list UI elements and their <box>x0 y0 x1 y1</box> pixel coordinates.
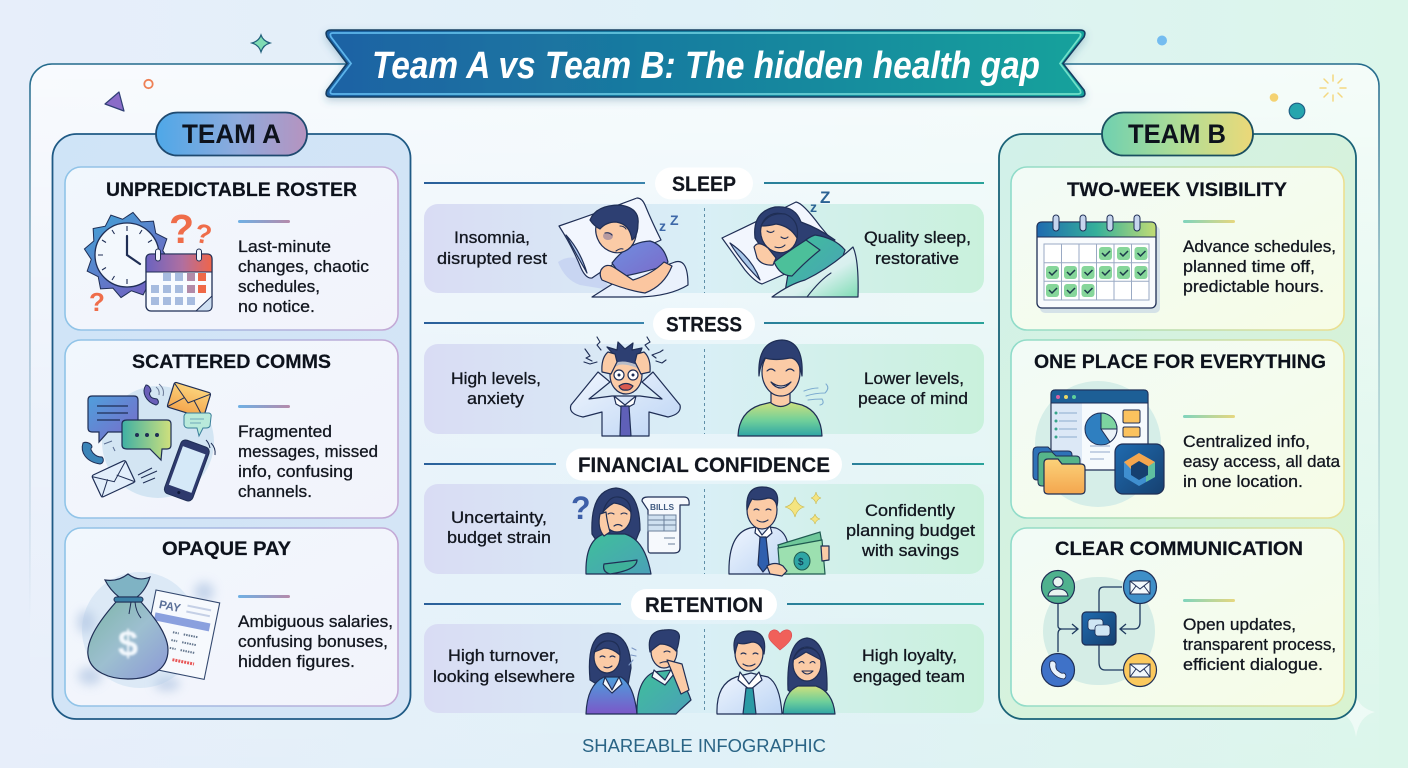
team B text <box>864 228 971 268</box>
description: changes, chaotic <box>238 257 370 276</box>
icon: disengaged coworkers <box>586 630 691 714</box>
team A pill: TEAM A <box>182 119 281 149</box>
description: messages, missed <box>238 442 378 461</box>
section: financial confidence <box>424 448 984 576</box>
panel: team B <box>999 112 1356 719</box>
team A pill <box>156 112 307 156</box>
comparison band <box>424 204 984 293</box>
team B text: Lower levels, <box>864 369 964 388</box>
description: transparent process, <box>1183 635 1336 654</box>
card: two-week visibility <box>1011 167 1344 330</box>
description: confusing bonuses, <box>238 632 388 651</box>
section: stress <box>424 308 984 436</box>
accent line <box>238 405 290 408</box>
accent line <box>1183 599 1235 602</box>
card: one place for everything <box>1011 340 1344 518</box>
icon: restful sleeper: Z <box>820 188 830 207</box>
icon: restful sleeper <box>722 188 858 297</box>
description: easy access, all data <box>1183 452 1341 471</box>
team A text: High turnover, <box>448 646 559 665</box>
icon: scattered messages <box>82 382 215 502</box>
description: in one location. <box>1183 472 1303 491</box>
section header <box>424 589 984 620</box>
team A text: Uncertainty, <box>451 508 547 527</box>
section header <box>424 168 984 200</box>
accent line <box>238 595 290 598</box>
description: info, confusing <box>238 462 353 481</box>
icon: restful sleeper: z <box>810 199 817 215</box>
section header: SLEEP <box>672 173 736 196</box>
team B text: Quality sleep, <box>864 228 971 247</box>
team A text <box>447 508 551 547</box>
comparison band <box>424 484 984 574</box>
team A text: High levels, <box>451 369 541 388</box>
description <box>238 612 393 671</box>
team A text <box>451 369 541 408</box>
heading: TWO-WEEK VISIBILITY <box>1067 179 1287 201</box>
icon: clock and calendar: ? <box>169 206 194 252</box>
card: scattered comms <box>65 340 398 518</box>
team A text: Insomnia, <box>454 228 530 247</box>
icon: clock and calendar: ? <box>89 287 105 317</box>
team B text: Confidently <box>865 501 956 520</box>
team B text: High loyalty, <box>862 646 957 665</box>
section: retention <box>424 589 984 714</box>
description: channels. <box>238 482 312 501</box>
card: clear communication <box>1011 528 1344 706</box>
panel: team A <box>52 112 410 719</box>
heading: UNPREDICTABLE ROSTER <box>106 179 357 201</box>
icon: money bag and pay slip: PAY <box>158 599 182 615</box>
icon: confident saver <box>729 487 829 576</box>
icon: worried budgeter <box>571 488 689 574</box>
team B text: engaged team <box>853 667 965 686</box>
icon: restless sleeper: Z <box>670 212 679 228</box>
section header: STRESS <box>666 314 742 336</box>
description <box>238 422 378 501</box>
section header: FINANCIAL CONFIDENCE <box>578 454 830 477</box>
card: unpredictable roster <box>65 167 398 330</box>
card: opaque pay <box>65 528 398 706</box>
description: Advance schedules, <box>1183 237 1336 256</box>
section header <box>424 448 984 480</box>
description: no notice. <box>238 297 315 316</box>
icon: dashboard with folders <box>1033 381 1164 507</box>
title banner <box>326 30 1085 97</box>
description: predictable hours. <box>1183 277 1324 296</box>
description: efficient dialogue. <box>1183 655 1323 674</box>
icon: money bag and pay slip: $ <box>118 623 138 664</box>
accent line <box>1183 415 1235 418</box>
section: sleep <box>424 168 984 297</box>
team A text: anxiety <box>467 389 525 408</box>
team B text: peace of mind <box>858 389 968 408</box>
description: Last-minute <box>238 237 331 256</box>
heading: OPAQUE PAY <box>162 538 291 560</box>
description <box>238 237 370 316</box>
team B text: planning budget <box>846 521 975 540</box>
heading: SCATTERED COMMS <box>132 351 331 373</box>
icon: money bag and pay slip <box>77 572 220 691</box>
team B pill: TEAM B <box>1128 119 1226 149</box>
description <box>1183 615 1336 674</box>
team B text <box>846 501 975 560</box>
description <box>1183 432 1341 491</box>
section header <box>424 308 984 340</box>
icon: clock and calendar: ? <box>193 218 214 250</box>
team A text: looking elsewhere <box>433 667 575 686</box>
team B text: restorative <box>875 249 959 268</box>
team B text: with savings <box>861 541 959 560</box>
accent line <box>238 220 290 223</box>
description: Ambiguous salaries, <box>238 612 393 631</box>
icon: engaged teammates <box>717 630 835 714</box>
comparison band <box>424 344 984 434</box>
icon: clock and calendar <box>78 206 214 317</box>
team A text: disrupted rest <box>437 249 547 268</box>
heading: ONE PLACE FOR EVERYTHING <box>1034 351 1326 373</box>
description: schedules, <box>238 277 320 296</box>
icon: confident saver: $ <box>798 557 804 568</box>
team B text <box>853 646 965 686</box>
icon: restless sleeper: z <box>659 218 666 234</box>
icon: checked calendar <box>1037 215 1160 313</box>
icon: worried budgeter: BILLS <box>650 503 675 512</box>
footer label: SHAREABLE INFOGRAPHIC <box>582 736 826 756</box>
description: hidden figures. <box>238 652 355 671</box>
description: planned time off, <box>1183 257 1315 276</box>
section header: RETENTION <box>645 594 763 617</box>
description: Fragmented <box>238 422 332 441</box>
comparison band <box>424 624 984 713</box>
team A text <box>437 228 547 268</box>
accent line <box>1183 220 1235 223</box>
description: Open updates, <box>1183 615 1296 634</box>
icon: restless sleeper <box>558 198 688 297</box>
description <box>1183 237 1336 296</box>
icon: worried budgeter: ? <box>571 490 591 526</box>
icon: calm worker <box>738 340 828 436</box>
team B text <box>858 369 968 408</box>
description: Centralized info, <box>1183 432 1310 451</box>
heading: CLEAR COMMUNICATION <box>1055 538 1303 560</box>
team B pill <box>1102 112 1253 156</box>
icon: stressed worker <box>570 337 680 436</box>
team A text <box>433 646 575 686</box>
title text: Team A vs Team B: The hidden health gap <box>372 45 1040 87</box>
team A text: budget strain <box>447 528 551 547</box>
icon: communication network <box>1042 570 1156 686</box>
